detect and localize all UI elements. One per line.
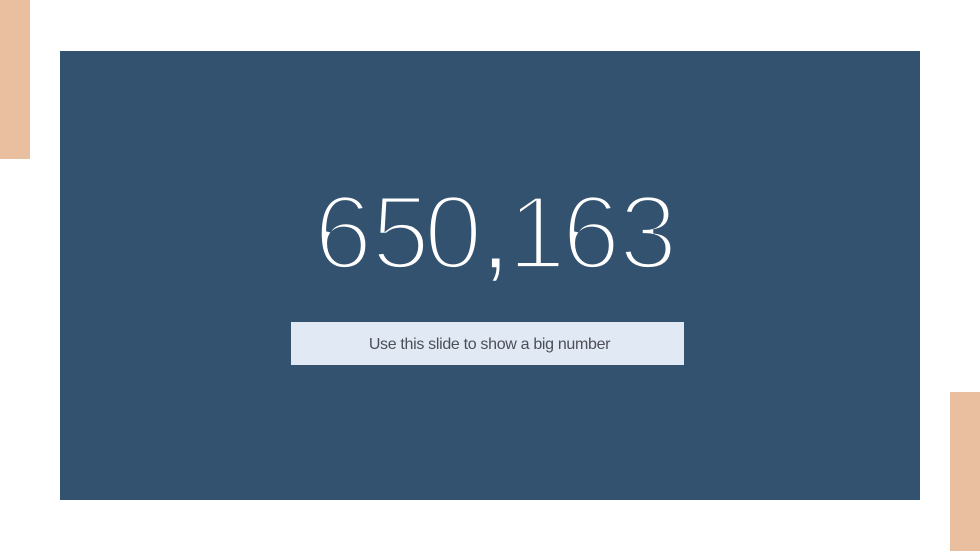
caption box: Use this slide to show a big number [369,336,610,353]
panel: main background [60,51,920,500]
caption box [291,322,684,365]
big number: , [481,174,510,292]
decorative accent bar: top left [0,0,30,159]
decorative accent bar: bottom right [950,392,980,551]
big number: 650 [314,174,482,292]
big number: 163 [508,174,677,292]
big number [314,174,677,292]
